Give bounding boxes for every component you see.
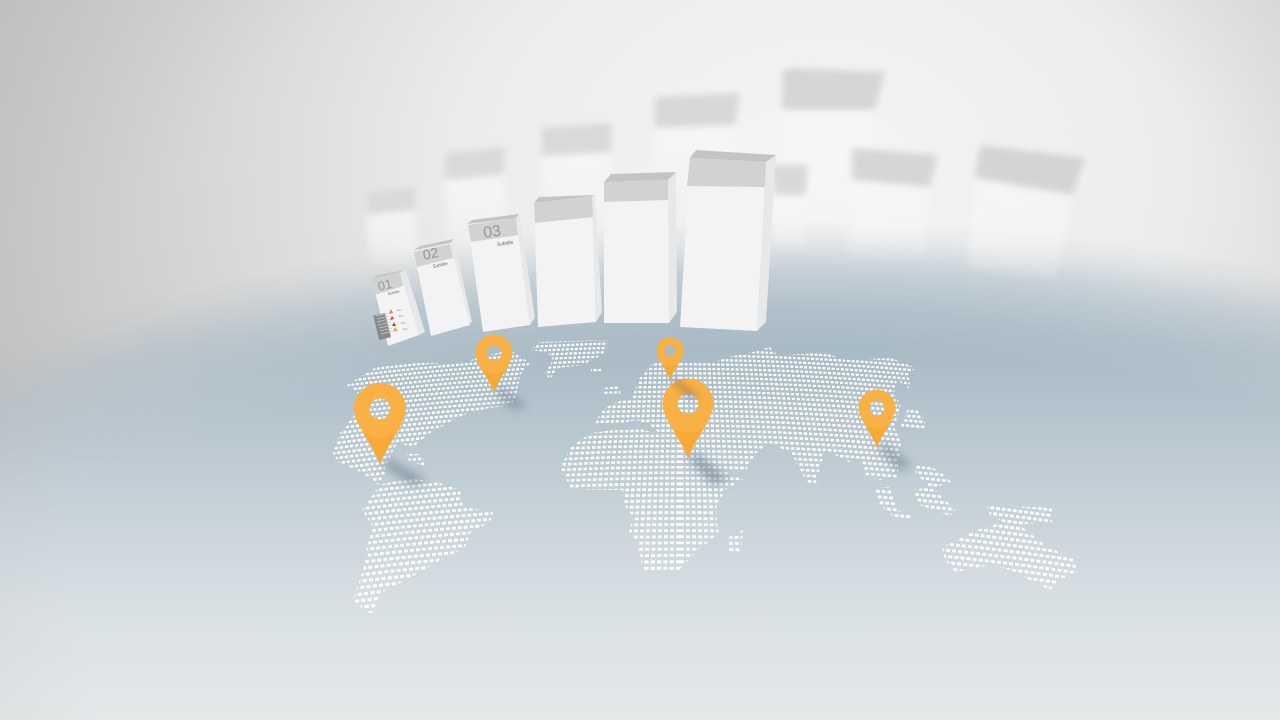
number 02: 02 [421,244,440,263]
back bar 6 [770,165,808,250]
blurred background bars [367,68,1085,285]
back bar 5 [782,68,885,215]
bar 5 [604,172,677,323]
small legend labels: Item [397,309,402,312]
small legend labels: Item [401,322,406,325]
pin: Canada east [476,335,512,393]
bar 4 [534,195,602,327]
bar 1: 01 [372,270,425,346]
small legend labels: Item [403,328,408,331]
back bar 1 [367,188,420,270]
subtitle 03: Subtitle [496,240,514,248]
bar 2: 02 [414,239,472,336]
subtitle 01: Subtitle [387,290,400,296]
bar 6 [680,150,776,331]
back bar 8 [968,145,1085,285]
pin: Europe [656,337,684,380]
number 01: 01 [376,276,394,294]
small triangle icons [389,309,398,331]
back bar 7 [848,148,938,262]
number 03: 03 [482,223,502,242]
pin: North America [354,383,406,465]
back bar 4 [655,93,740,200]
striped legend block [373,313,393,340]
small legend labels: Item [399,315,404,318]
back bar 3 [542,123,614,238]
dotted world map [333,340,1077,613]
pin: East Asia [858,390,896,448]
blue globe horizon [0,233,1280,720]
small legend labels [397,309,408,331]
subtitle 02: Subtitle [432,261,449,269]
back bar 2 [445,147,510,255]
pin: North Africa [662,378,714,459]
pin shadows [380,388,912,486]
bar 3: 03 [467,214,535,332]
Europe pin shadow on Africa pin [670,378,700,400]
